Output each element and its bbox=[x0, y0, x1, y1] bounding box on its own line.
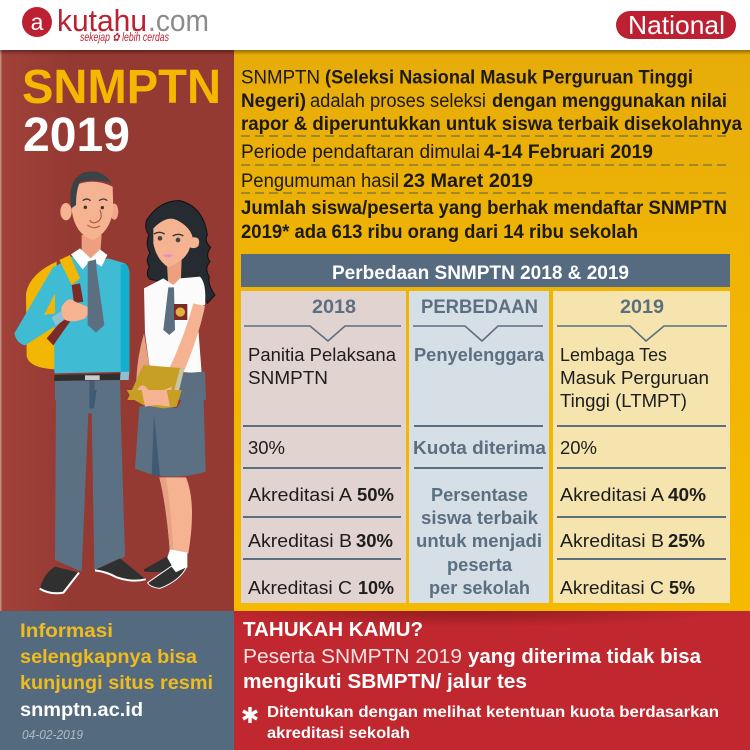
text block: announcement date: 23 Maret 2019 bbox=[403, 171, 533, 192]
panel: more information bbox=[0, 611, 234, 750]
illustration: male student bbox=[14, 171, 146, 593]
column: PERBEDAAN: peserta bbox=[447, 554, 513, 575]
column: 2019: 40% bbox=[668, 484, 706, 505]
panel: more information: kunjungi situs resmi bbox=[20, 673, 213, 694]
logo: kutahu bbox=[57, 3, 147, 38]
panel: left maroon with title and students bbox=[0, 50, 234, 611]
column: PERBEDAAN bbox=[409, 291, 549, 603]
table heading: Perbedaan SNMPTN 2018 & 2019 bbox=[332, 263, 629, 284]
text block: SNMPTN definition: dengan menggunakan nilai bbox=[492, 91, 727, 112]
column: 2018: Panitia Pelaksana bbox=[248, 344, 397, 365]
logo: a bbox=[31, 9, 44, 35]
column: 2018: Akreditasi A bbox=[248, 484, 353, 505]
text block: registration period bbox=[241, 142, 653, 163]
column: 2019 bbox=[553, 291, 730, 603]
icon: asterisk bbox=[243, 707, 257, 723]
text block: announcement date: Pengumuman hasil bbox=[241, 171, 399, 192]
text block: SNMPTN definition: (Seleksi Nasional Masuk Perguruan Tinggi bbox=[325, 68, 693, 88]
panel: more information: snmptn.ac.id bbox=[20, 700, 143, 721]
text block: registration period: Periode pendaftaran dimulai bbox=[241, 142, 480, 163]
column: 2019: Akreditasi B bbox=[560, 530, 664, 551]
text block: SBMPTN note: yang diterima tidak bisa bbox=[468, 646, 702, 668]
column: PERBEDAAN: untuk menjadi bbox=[416, 530, 542, 551]
comparison table bbox=[241, 254, 730, 603]
title: SNMPTN: SNMPTN bbox=[22, 61, 221, 114]
text block: SBMPTN note: Peserta SNMPTN 2019 bbox=[243, 646, 462, 668]
column: 2018: 30% bbox=[248, 437, 285, 458]
footnote: Ditentukan dengan melihat ketentuan kuota berdasarkan bbox=[267, 704, 719, 721]
column: PERBEDAAN: Penyelenggara bbox=[414, 344, 545, 365]
column: 2018: 30% bbox=[356, 530, 393, 551]
logo: sekejap ✿ lebih cerdas bbox=[80, 32, 169, 44]
column: PERBEDAAN: PERBEDAAN bbox=[421, 297, 538, 318]
category badge: National: National bbox=[628, 10, 725, 40]
title: 2019: 2019 bbox=[23, 109, 130, 162]
column: 2019: 25% bbox=[668, 530, 705, 551]
column: 2019: Tinggi (LTMPT) bbox=[560, 390, 687, 411]
panel: did you know bbox=[234, 611, 750, 750]
column: 2019: Akreditasi A bbox=[560, 484, 665, 505]
column: 2018: 10% bbox=[358, 577, 394, 598]
logo: .com bbox=[148, 3, 209, 38]
footnote: akreditasi sekolah bbox=[267, 725, 410, 742]
column: 2018: Akreditasi B bbox=[248, 530, 352, 551]
date: 04-02-2019 bbox=[22, 728, 83, 742]
column: PERBEDAAN: Persentase bbox=[431, 484, 528, 505]
column: 2018: 2018 bbox=[312, 297, 356, 318]
text block: SNMPTN definition: rapor & diperuntukkan untuk siswa terbaik disekolahnya bbox=[241, 114, 742, 135]
column: 2018 bbox=[241, 291, 406, 603]
text block: registration period: 4-14 Februari 2019 bbox=[484, 142, 653, 163]
column: 2019: Lembaga Tes bbox=[560, 344, 667, 365]
column: 2018: Akreditasi C bbox=[248, 577, 352, 598]
text block: number of participants: Jumlah siswa/peserta yang berhak mendaftar SNMPTN bbox=[241, 198, 727, 219]
column: 2019: Akreditasi C bbox=[560, 577, 664, 598]
text block: SNMPTN definition: Negeri) bbox=[241, 91, 306, 112]
footnote bbox=[267, 704, 719, 742]
panel: more information: Informasi bbox=[20, 621, 113, 642]
column: 2018: 50% bbox=[357, 484, 394, 505]
column: PERBEDAAN: siswa terbaik bbox=[421, 507, 539, 528]
illustration: female student bbox=[127, 201, 215, 588]
text block: number of participants: 2019* ada 613 ribu orang dari 14 ribu sekolah bbox=[241, 222, 638, 243]
text block: SNMPTN definition bbox=[241, 68, 742, 135]
heading: TAHUKAH KAMU: TAHUKAH KAMU? bbox=[243, 619, 423, 641]
column: PERBEDAAN: per sekolah bbox=[429, 577, 530, 598]
text block: SNMPTN definition: SNMPTN bbox=[241, 68, 320, 88]
column: 2018: SNMPTN bbox=[248, 367, 328, 388]
text block: SNMPTN definition: adalah proses seleksi bbox=[310, 91, 486, 112]
column: 2019: 5% bbox=[669, 577, 695, 598]
text block: announcement date bbox=[241, 171, 533, 192]
text block: number of participants bbox=[241, 198, 727, 243]
text block: SBMPTN note: mengikuti SBMPTN/ jalur tes bbox=[243, 671, 527, 693]
column: 2019: 2019 bbox=[620, 297, 664, 318]
logo bbox=[22, 3, 209, 44]
column: 2019: 20% bbox=[560, 437, 597, 458]
panel: right yellow background bbox=[234, 50, 750, 611]
column: 2019: Masuk Perguruan bbox=[560, 367, 709, 388]
panel: more information: selengkapnya bisa bbox=[20, 647, 197, 668]
table heading bbox=[241, 254, 730, 287]
text block: SBMPTN note bbox=[243, 646, 702, 693]
column: PERBEDAAN: Kuota diterima bbox=[413, 437, 547, 458]
